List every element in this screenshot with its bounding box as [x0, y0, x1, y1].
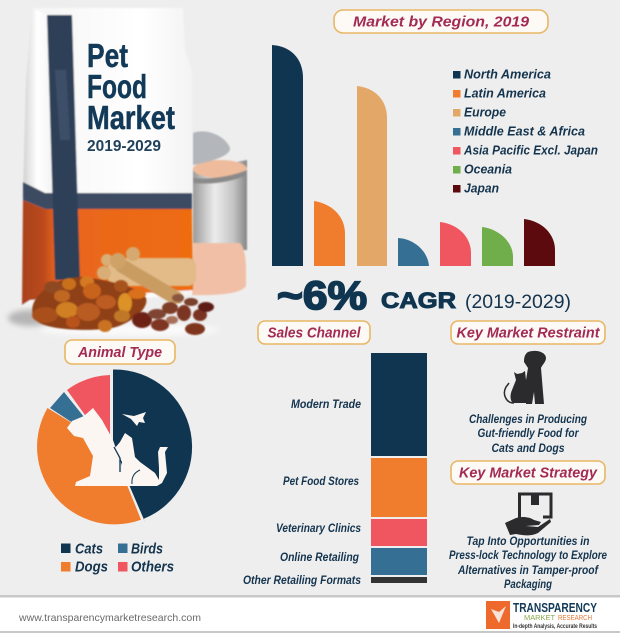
bag title: Food — [87, 68, 147, 105]
legend: regions: Latin America — [464, 86, 546, 100]
text: restraint description — [469, 412, 588, 455]
heading: market by region: Market by Region, 2019 — [353, 14, 530, 30]
icon: dog and cat silhouette — [67, 408, 168, 486]
legend: animal type: Dogs — [75, 558, 108, 576]
dog bones — [97, 247, 196, 298]
footer url: www.transparencymarketresearch.com — [18, 612, 201, 624]
can of food — [192, 131, 247, 295]
slice: birds — [50, 392, 84, 425]
icon: bird — [122, 412, 146, 426]
labels: sales channel: Veterinary Clinics — [276, 521, 361, 535]
bag body — [22, 8, 193, 305]
labels: sales channel: Other Retailing Formats — [243, 573, 361, 587]
bar chart: market by region — [272, 45, 555, 266]
kibble — [32, 276, 146, 332]
heading: sales channel — [258, 321, 370, 344]
stacked bar: sales channel — [371, 353, 427, 583]
logo: transparency market research: RESEARCH — [558, 615, 592, 622]
legend: animal type: Birds — [131, 540, 163, 558]
logo: transparency market research: TRANSPARENCY — [513, 600, 597, 615]
legend: regions: Asia Pacific Excl. Japan — [463, 142, 598, 158]
CAGR callout: (2019-2029) — [465, 292, 571, 313]
bag title — [87, 37, 175, 155]
slice: dogs — [37, 408, 141, 524]
CAGR callout — [277, 274, 571, 318]
heading: market by region — [334, 10, 548, 33]
labels: sales channel: Modern Trade — [291, 397, 361, 411]
text: restraint description: Challenges in Producing — [469, 412, 588, 426]
labels: sales channel: Pet Food Stores — [283, 474, 359, 488]
beans — [132, 294, 214, 335]
footer — [0, 595, 620, 633]
icon: dog and cat — [504, 351, 546, 404]
logo: transparency market research: MARKET — [524, 615, 556, 622]
illustration: pet food bag and products — [8, 8, 247, 336]
text: restraint description: Gut-friendly Food for — [478, 426, 580, 440]
heading: animal type — [65, 340, 175, 364]
labels: sales channel: Online Retailing — [280, 550, 360, 564]
pie chart: animal type — [37, 369, 192, 524]
logo: transparency market research: In-depth Analysis, Accurate Results — [513, 624, 598, 630]
heading: key market strategy: Key Market Strategy — [459, 464, 598, 482]
legend: regions — [453, 66, 598, 196]
bag title: Pet — [87, 37, 128, 74]
bag title: 2019-2029 — [87, 138, 161, 155]
logo: transparency market research — [486, 600, 598, 630]
text: strategy description: Packaging — [504, 577, 553, 591]
labels: sales channel — [243, 397, 361, 587]
legend: regions: Middle East & Africa — [464, 124, 585, 138]
legend: regions: Japan — [464, 180, 499, 196]
legend: animal type: Others — [131, 558, 174, 576]
legend: regions: Oceania — [464, 162, 512, 176]
bag title: Market — [87, 99, 175, 136]
text: strategy description: Alternatives in Tamper-proof — [457, 563, 599, 577]
legend: regions: Europe — [464, 104, 506, 120]
slice: others — [67, 375, 110, 435]
legend: animal type — [61, 540, 174, 576]
heading: sales channel: Sales Channel — [268, 324, 361, 342]
heading: animal type: Animal Type — [77, 344, 162, 361]
slice: cats — [113, 369, 192, 522]
text: strategy description — [449, 534, 607, 591]
heading: key market restraint: Key Market Restraint — [456, 324, 600, 342]
text: restraint description: Cats and Dogs — [492, 441, 565, 455]
CAGR callout: CAGR — [381, 288, 456, 313]
legend: regions: North America — [464, 66, 551, 82]
icon: hand holding package — [505, 494, 551, 535]
legend: animal type: Cats — [75, 540, 103, 558]
heading: key market strategy — [451, 461, 605, 484]
CAGR callout: ~6% — [277, 274, 367, 318]
text: strategy description: Tap Into Opportunities in — [466, 534, 590, 548]
ground highlight and shadow — [8, 310, 220, 336]
